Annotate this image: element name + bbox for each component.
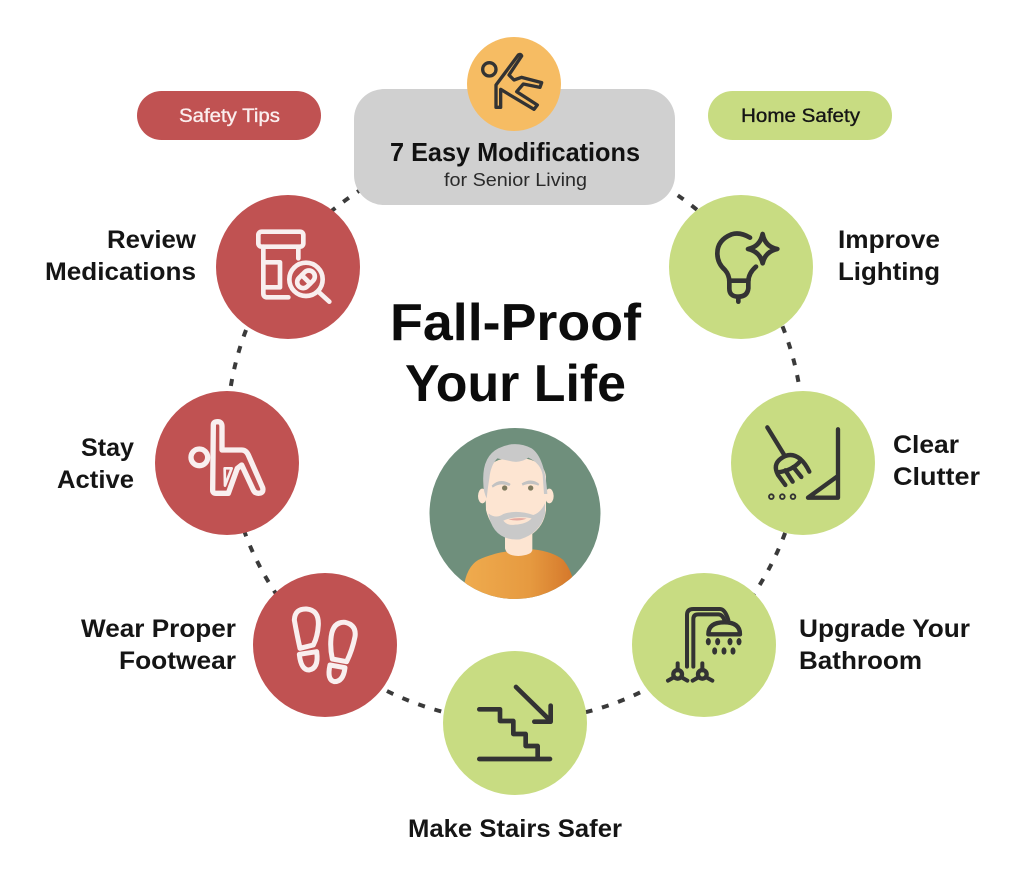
step: Make Stairs Safer: Make Stairs Safer <box>408 815 622 843</box>
pill: Home Safety: Home Safety <box>741 106 861 127</box>
title: Your Life <box>405 355 626 413</box>
step: Improve Lighting <box>669 195 940 339</box>
step: Stay Active: Stay <box>81 434 134 462</box>
pill: Safety Tips <box>137 91 321 140</box>
step: Make Stairs Safer <box>408 651 622 843</box>
header panel: 7 Easy Modifications <box>354 89 675 205</box>
icon: light bulb with sparkle <box>717 234 777 302</box>
step: Upgrade Your Bathroom: Upgrade Your <box>799 615 970 643</box>
icon: stairs with arrow <box>479 687 551 759</box>
icon: falling person <box>467 37 561 131</box>
step: Wear Proper Footwear: Footwear <box>119 647 236 675</box>
pill: Safety Tips: Safety Tips <box>179 106 280 127</box>
icon: pill bottle with magnifier <box>258 232 329 302</box>
icon: broom and corner <box>767 427 838 499</box>
step: Improve Lighting: Lighting <box>838 258 940 286</box>
step: Stay Active: Active <box>57 466 134 494</box>
pill: Home Safety <box>708 91 892 140</box>
icon: stretching person <box>191 422 263 493</box>
step: Wear Proper Footwear <box>81 573 397 717</box>
step: Improve Lighting: Improve <box>838 226 940 254</box>
portrait: senior man <box>430 428 600 607</box>
step: Review Medications: Review <box>107 226 197 254</box>
header panel: 7 Easy Modifications: 7 Easy Modifications <box>390 137 640 167</box>
step: Clear Clutter: Clutter <box>893 463 980 491</box>
step: Review Medications <box>45 195 360 339</box>
step: Upgrade Your Bathroom <box>632 573 970 717</box>
step: Stay Active <box>57 391 299 535</box>
title <box>390 294 642 413</box>
step: Upgrade Your Bathroom: Bathroom <box>799 647 922 675</box>
header panel: 7 Easy Modifications: for Senior Living <box>444 169 587 190</box>
step: Clear Clutter: Clear <box>893 431 959 459</box>
icon: shoe prints <box>294 609 355 682</box>
step: Review Medications: Medications <box>45 258 196 286</box>
title: Fall-Proof <box>390 294 642 352</box>
step: Clear Clutter <box>731 391 980 535</box>
icon: shower <box>668 609 741 681</box>
step: Wear Proper Footwear: Wear Proper <box>81 615 236 643</box>
